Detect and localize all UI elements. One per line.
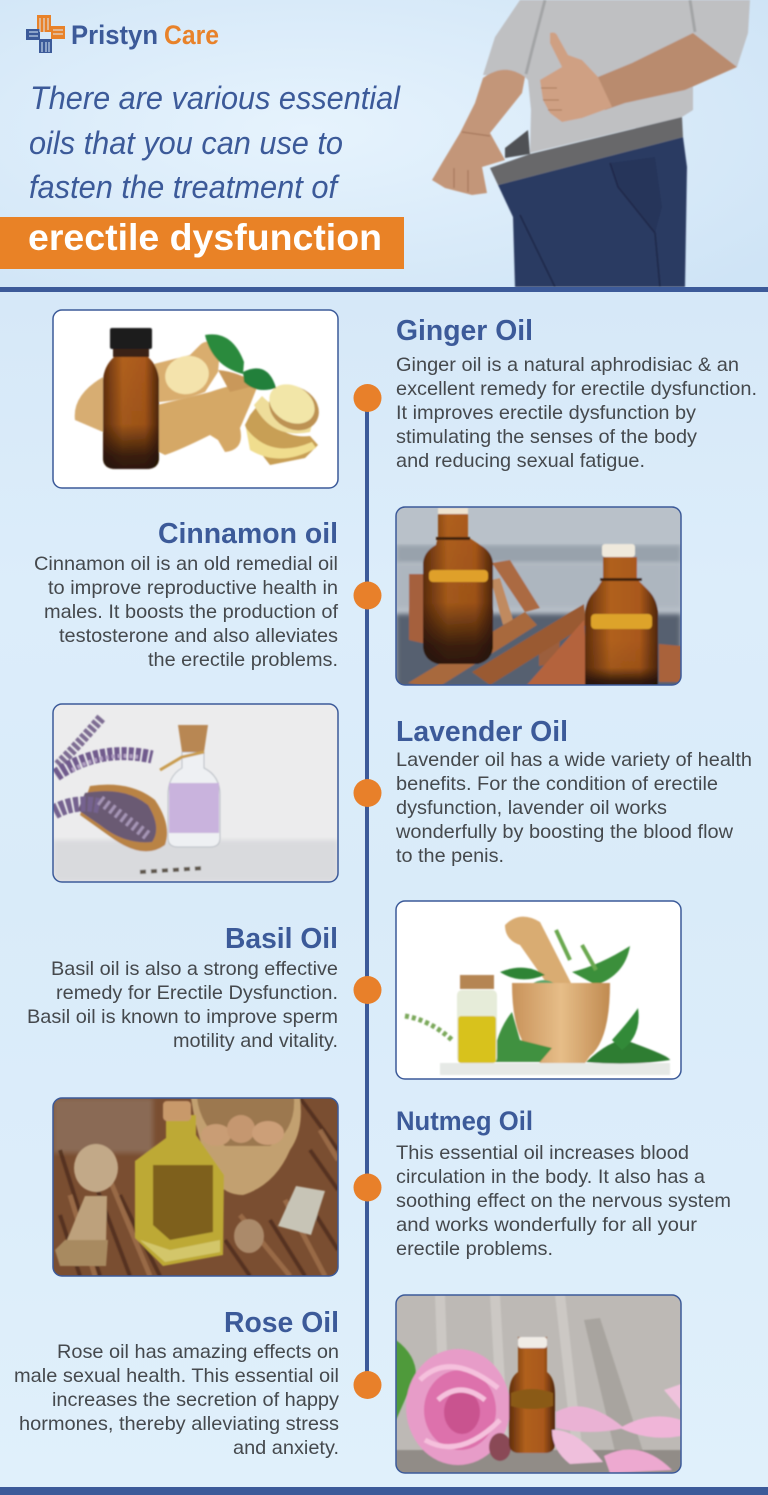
text: cinnamon oil: to improve reproductive health in (48, 577, 338, 599)
logo: Pristyn Care: Care (164, 20, 219, 50)
glass bottle (168, 752, 220, 847)
text: cinnamon oil: Cinnamon oil is an old remedial oil (34, 553, 338, 575)
text: lavender oil (395, 716, 752, 867)
petals (556, 1406, 624, 1432)
text: basil oil (27, 923, 338, 1052)
logo: Pristyn Care (26, 15, 219, 53)
scattered seeds (140, 868, 205, 872)
intro heading: oils that you can use to (29, 125, 343, 161)
text: ginger oil: Ginger oil is a natural aphrodisiac & an (396, 354, 739, 376)
small branch (405, 1016, 452, 1040)
timeline dot 3 (354, 779, 382, 807)
text: ginger oil: stimulating the senses of the body (396, 426, 697, 448)
text: rose oil: and anxiety. (233, 1437, 339, 1459)
timeline dot 2 (354, 582, 382, 610)
timeline line (365, 398, 369, 1385)
text: nutmeg oil: This essential oil increases blood (396, 1142, 689, 1164)
text: nutmeg oil (396, 1106, 731, 1260)
text: lavender oil: dysfunction, lavender oil works (396, 797, 667, 819)
timeline dot 6 (354, 1371, 382, 1399)
left arm and hand (432, 70, 525, 195)
text: cinnamon oil: Cinnamon oil (158, 518, 338, 550)
lavender sprigs (58, 717, 102, 765)
illustration: man giving thumbs up holding waistband (432, 0, 750, 287)
grater (278, 1186, 325, 1235)
bottom bar (0, 1487, 768, 1495)
thumbs up hand (540, 32, 612, 122)
herb leaves (500, 968, 545, 979)
waistband (505, 130, 530, 158)
leaf (396, 1340, 416, 1420)
panel: nutmeg oil image (53, 1098, 338, 1276)
banner: erectile dysfunction: erectile dysfunction (28, 216, 382, 258)
text: ginger oil: excellent remedy for erectile dysfunction. (396, 378, 757, 400)
text: lavender oil: Lavender Oil (396, 716, 568, 748)
intro heading: There are various essential (30, 80, 401, 116)
text: ginger oil: and reducing sexual fatigue. (396, 450, 645, 472)
panel: ginger oil image (53, 310, 338, 488)
text: lavender oil: Lavender oil has a wide variety of health (396, 749, 752, 771)
text: ginger oil: It improves erectile dysfunction by (396, 402, 696, 424)
oil bottle (460, 975, 494, 989)
text: basil oil: remedy for Erectile Dysfunction. (56, 982, 338, 1004)
divider (0, 287, 768, 292)
panel: basil oil image (396, 901, 681, 1079)
mint leaves (205, 334, 244, 374)
ginger root (75, 377, 103, 432)
ginger slices (245, 400, 318, 465)
text: ginger oil: Ginger Oil (396, 315, 533, 347)
trousers (498, 137, 687, 287)
shirt (483, 0, 750, 153)
text: lavender oil: wonderfully by boosting the blood flow (395, 821, 734, 843)
timeline dot 5 (354, 1174, 382, 1202)
amber bottle (110, 328, 152, 349)
wood boards (435, 1296, 581, 1440)
timeline dot 1 (354, 384, 382, 412)
text: nutmeg oil: and works wonderfully for all your (396, 1214, 697, 1236)
text: rose oil: increases the secretion of happy (52, 1389, 339, 1411)
text: nutmeg oil: erectile problems. (396, 1238, 553, 1260)
text: rose oil (14, 1307, 339, 1459)
timeline dot 4 (354, 976, 382, 1004)
logo wordmark: Pristyn (71, 20, 158, 50)
intro heading: fasten the treatment of (29, 169, 340, 205)
rose flower (406, 1349, 510, 1465)
pestle (505, 917, 572, 985)
text: basil oil: Basil oil is known to improve sperm (27, 1006, 338, 1028)
glass oil bottle (135, 1115, 224, 1266)
text: rose oil: Rose oil has amazing effects on (57, 1341, 339, 1363)
panel: rose oil image (396, 1295, 681, 1473)
banner: erectile dysfunction (0, 216, 404, 269)
wooden bowl (191, 1098, 301, 1195)
amber bottle (509, 1337, 555, 1453)
cinnamon sticks (409, 574, 426, 644)
wooden planks (53, 1098, 153, 1153)
text: rose oil: Rose Oil (224, 1307, 339, 1339)
text: cinnamon oil (34, 518, 339, 671)
nutmeg (234, 1219, 264, 1253)
panel: cinnamon oil image (396, 507, 681, 689)
text: nutmeg oil: circulation in the body. It also has a (396, 1166, 705, 1188)
panel: lavender oil image (53, 704, 338, 882)
bottle right (585, 557, 658, 686)
icon: medical cross (26, 15, 65, 53)
text: basil oil: motility and vitality. (173, 1030, 338, 1052)
text: lavender oil: benefits. For the condition of erectile (396, 773, 718, 795)
text: cinnamon oil: the erectile problems. (148, 649, 338, 671)
wooden bowl (80, 785, 167, 851)
text: cinnamon oil: males. It boosts the production of (44, 601, 339, 623)
bottle left (423, 510, 493, 664)
text: nutmeg oil: soothing effect on the nervous system (396, 1190, 731, 1212)
text: nutmeg oil: Nutmeg Oil (396, 1106, 533, 1136)
text: basil oil: Basil Oil (225, 923, 338, 955)
text: basil oil: Basil oil is also a strong effective (51, 958, 338, 980)
mortar (512, 983, 610, 1063)
burlap sack (74, 1144, 118, 1192)
text: rose oil: male sexual health. This essential oil (14, 1365, 339, 1387)
text: rose oil: hormones, thereby alleviating stress (19, 1413, 339, 1435)
text: ginger oil (396, 315, 757, 472)
leaves right (586, 1040, 670, 1064)
text: lavender oil: to the penis. (396, 845, 504, 867)
forearm right (598, 33, 737, 110)
rose buds at base (489, 1433, 511, 1461)
intro heading (29, 80, 401, 205)
text: cinnamon oil: testosterone and also alleviates (59, 625, 338, 647)
